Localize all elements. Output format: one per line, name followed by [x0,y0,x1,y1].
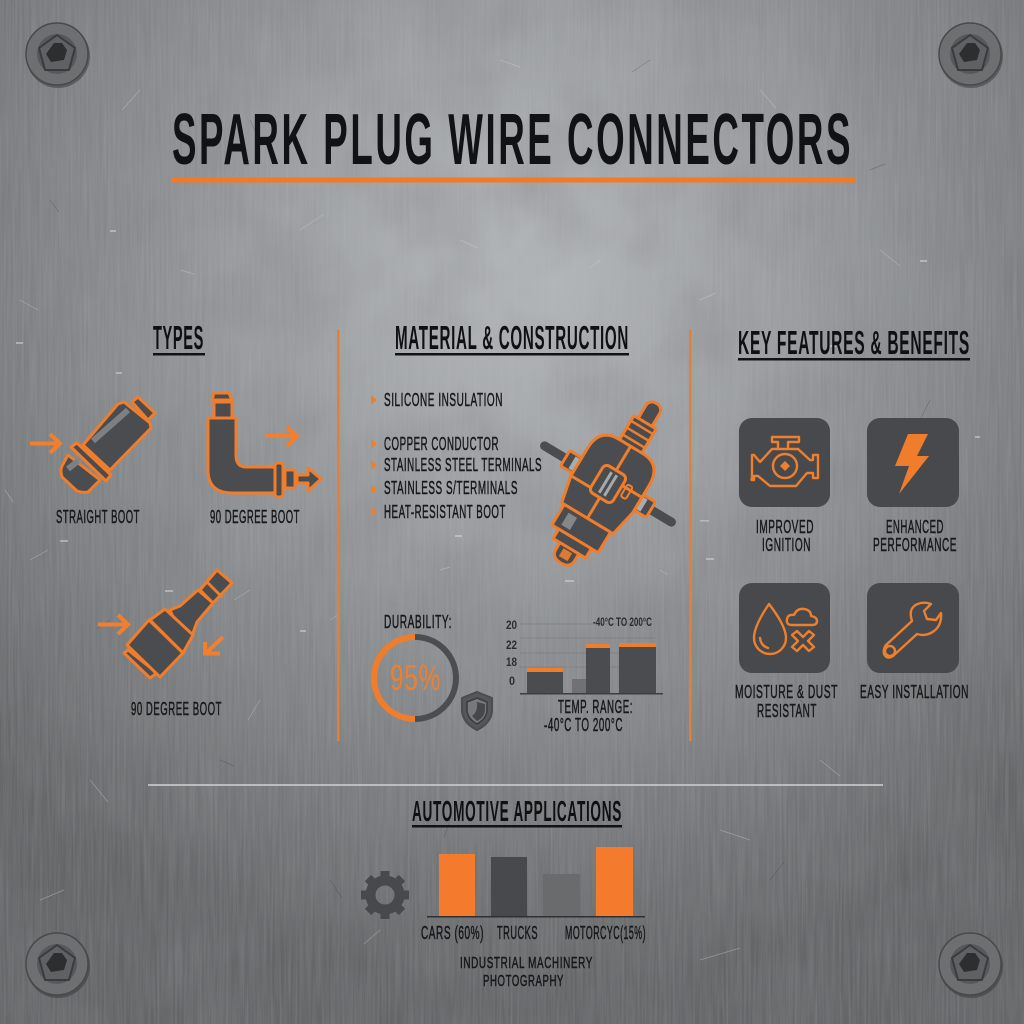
bar labels: CARS (60%) [421,923,484,943]
icon: wrench [884,603,941,658]
screw top left [26,23,90,88]
icon: gear [361,871,409,919]
panel: types: TYPES [153,319,204,356]
panel: material and construction: MATERIAL & CONSTRUCTION [395,319,629,356]
panel: material and construction [371,319,720,735]
panel: types [30,319,321,719]
feature: moisture and dust resistant [739,583,830,673]
feature: improved ignition [739,418,830,507]
label: enhanced performance [873,517,957,555]
panel: automotive applications: AUTOMOTIVE APPLICATIONS [412,796,622,828]
material bullet list: COPPER CONDUCTOR [384,434,499,454]
screw bottom left [26,933,90,998]
caption: INDUSTRIAL MACHINERY [460,955,593,972]
label: moisture and dust: MOISTURE & DUST [735,682,838,702]
durability donut chart: 95% [390,657,441,698]
temperature bar chart: -40°C TO 200°C [593,615,652,629]
label: moisture and dust: RESISTANT [757,701,817,721]
material bullet list [371,390,542,522]
label: enhanced performance: PERFORMANCE [873,535,957,555]
icon: angled boot [98,570,232,678]
panel: key features and benefits [735,324,970,721]
label: 90 degree boot: 90 DEGREE BOOT [210,507,300,527]
icon: engine [752,437,818,486]
label: enhanced performance: ENHANCED [886,517,944,537]
caption: PHOTOGRAPHY [483,973,564,990]
icon: lightning bolt [895,434,929,494]
temperature range label: TEMP. RANGE: [558,697,633,717]
feature: easy installation [867,583,959,673]
screw bottom right [939,933,1003,998]
label: straight boot: STRAIGHT BOOT [56,507,140,527]
icon: 90 degree boot [208,393,321,497]
screw top right [939,23,1003,88]
caption [460,955,593,990]
icon: shield [462,692,492,730]
icon: spark plug connector [497,365,720,601]
column divider left [337,330,340,741]
temperature bar chart: 0 [509,674,515,688]
section divider [148,784,883,786]
temperature bar chart: 20 [506,618,517,632]
label: improved ignition [756,517,814,555]
durability donut chart [374,637,456,719]
bar labels [421,923,646,943]
applications bar chart [427,847,645,918]
bar labels: TRUCKS [497,923,538,943]
panel: automotive applications [361,796,646,990]
temperature bar chart: 18 [506,655,517,669]
material bullet list: SILICONE INSULATION [384,390,503,410]
label: third boot: 90 DEGREE BOOT [131,699,222,719]
temperature range label: -40°C TO 200°C [544,715,623,735]
temperature range label [544,697,633,735]
text: MOTORCYC(15%) [565,923,646,943]
temperature bar chart [506,615,663,694]
icon: straight boot [30,397,155,492]
label: improved ignition: IGNITION [762,535,811,555]
label: moisture and dust [735,682,838,721]
feature: enhanced performance [867,418,959,507]
label: improved ignition: IMPROVED [756,517,814,537]
material bullet list: STAINLESS S/TERMINALS [384,478,518,498]
column divider right [689,330,692,741]
material bullet list: STAINLESS STEEL TERMINALS [384,455,542,475]
durability label: DURABILITY: [384,612,452,632]
heading: types [153,319,205,356]
material bullet list: HEAT-RESISTANT BOOT [384,502,506,522]
temperature bar chart: 22 [506,638,517,652]
icon: droplet cloud cross [754,604,817,654]
